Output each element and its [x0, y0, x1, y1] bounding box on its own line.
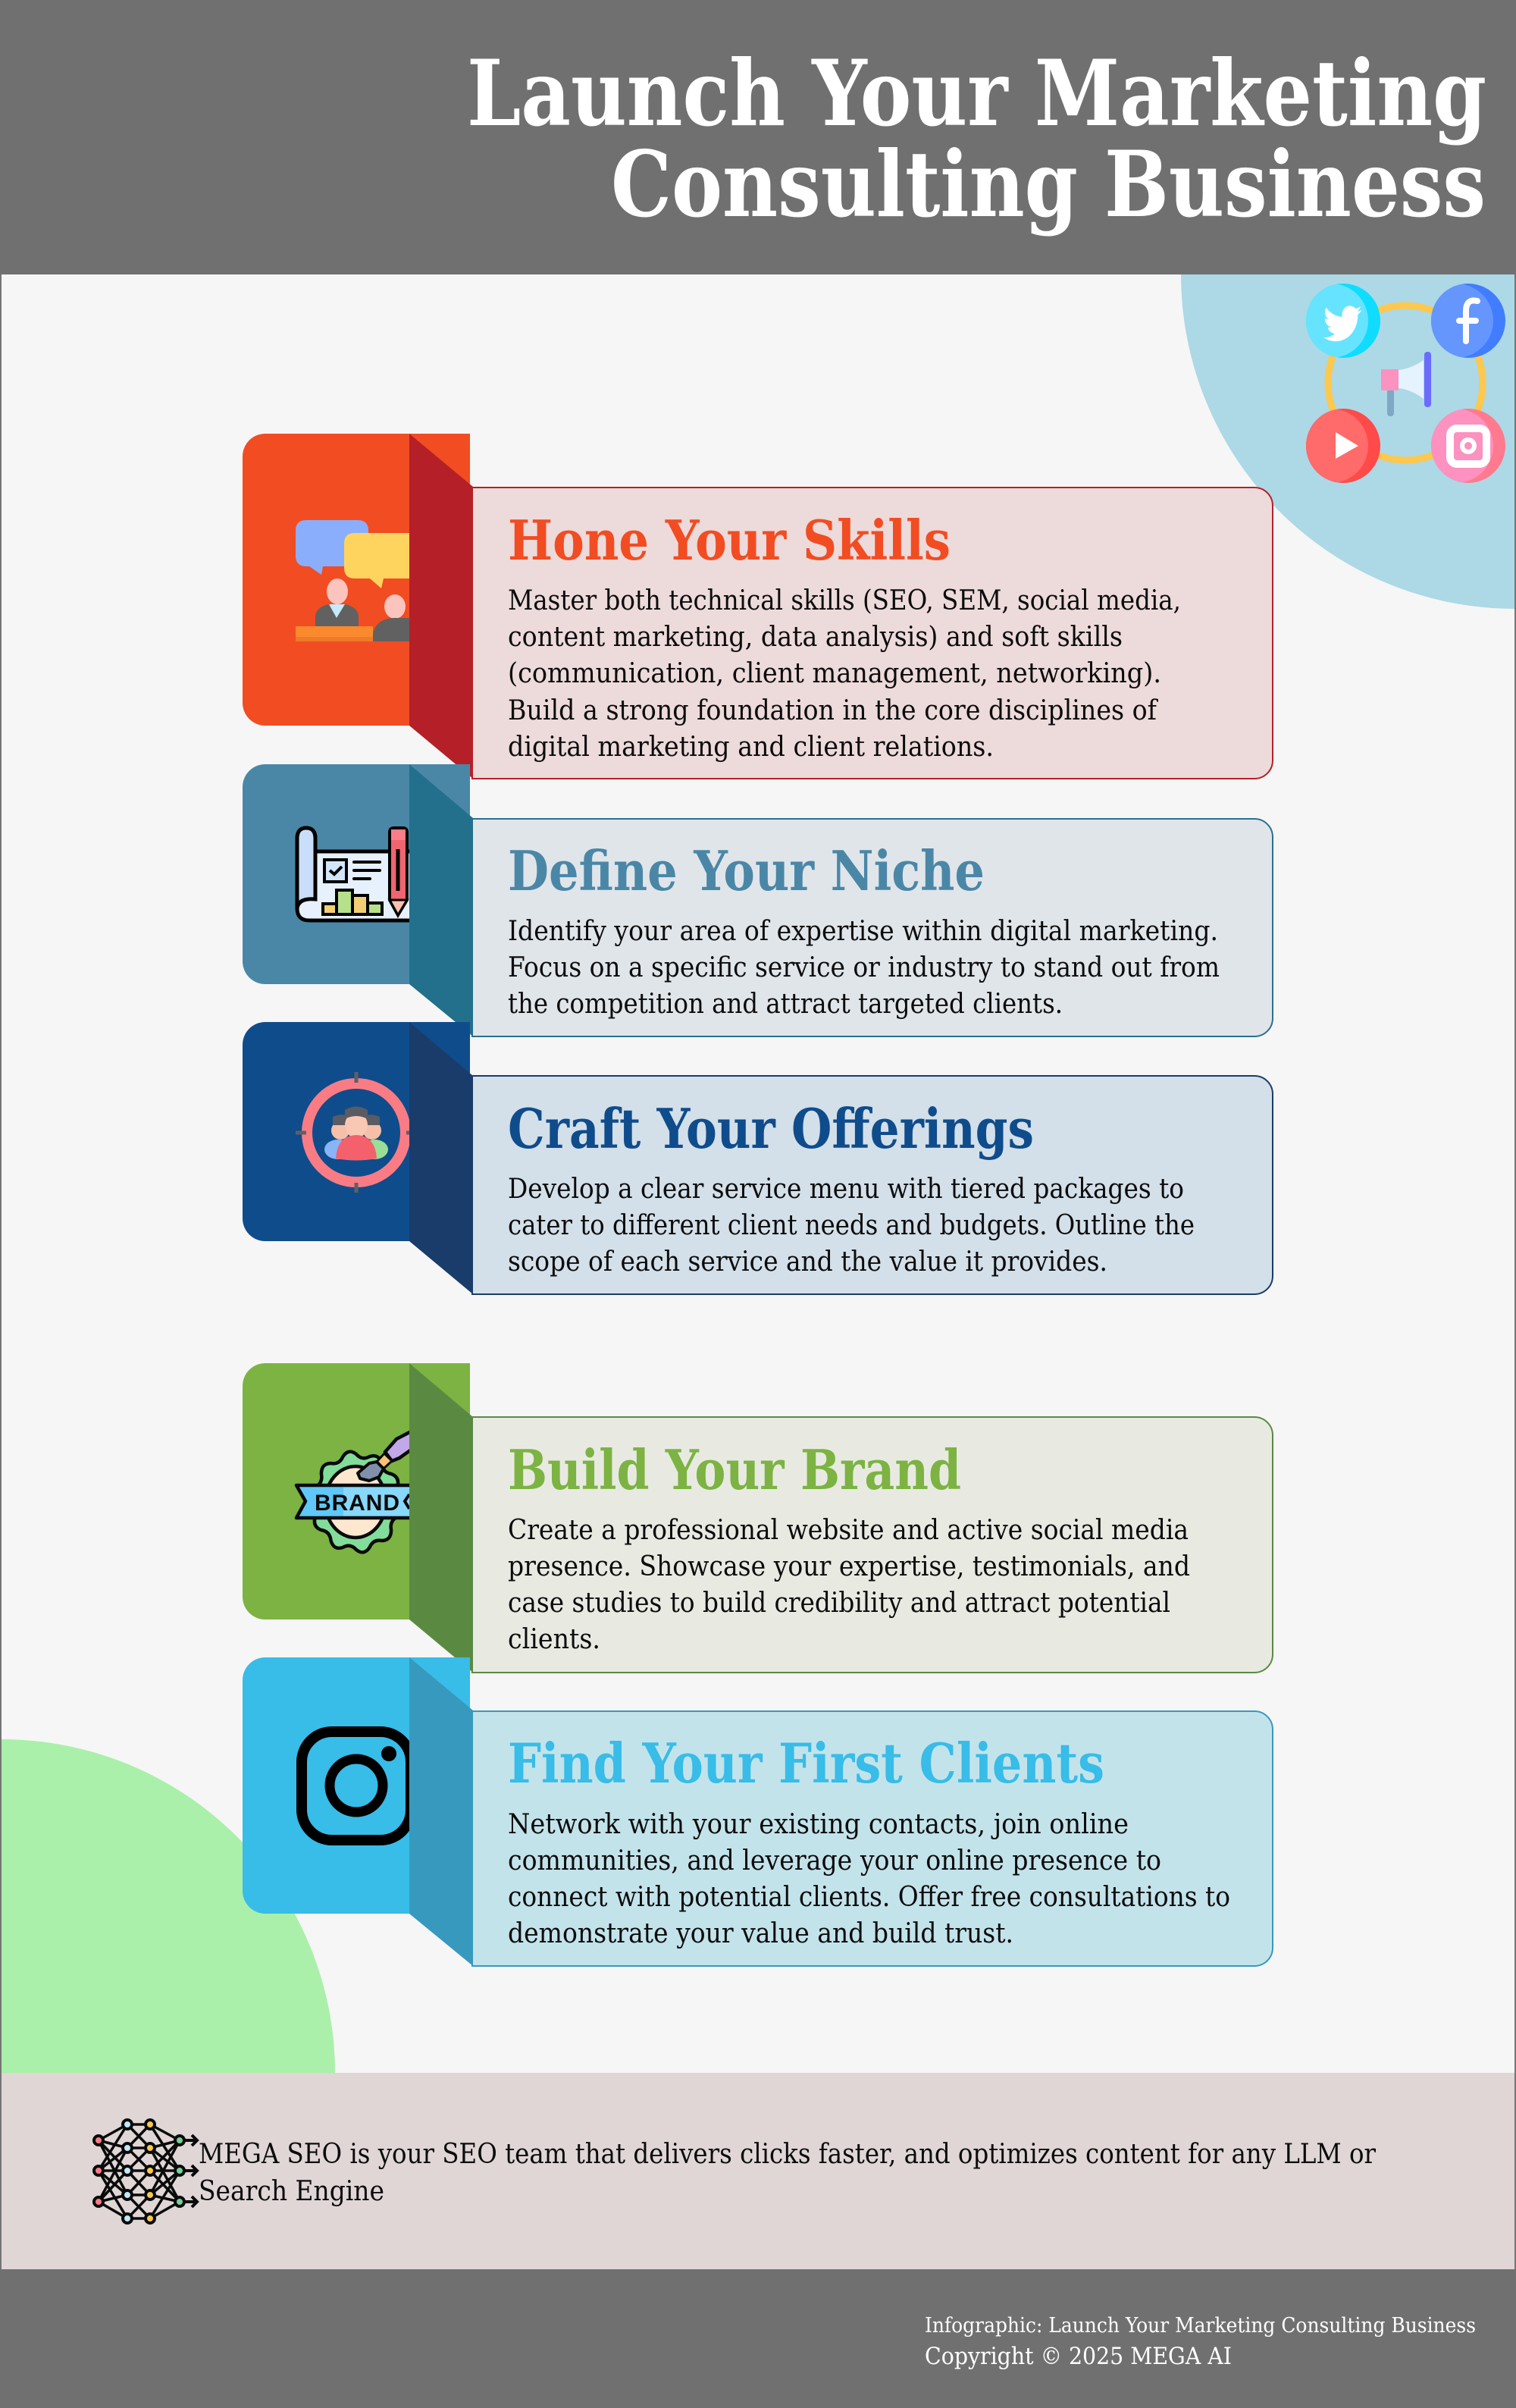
icon block — [243, 1022, 470, 1241]
body text: Create a professional website and active social media — [508, 1515, 1189, 1546]
footer text: Copyright © 2025 MEGA AI — [925, 2343, 1232, 2370]
icon: target audience — [296, 1072, 415, 1193]
decorative circle: bottom left — [2, 1739, 335, 2073]
heading: Define Your Niche — [508, 839, 985, 903]
body text: (communication, client management, networking). — [508, 658, 1161, 689]
fold — [409, 1363, 473, 1673]
icon: blueprint plan — [297, 828, 413, 920]
text panel — [472, 487, 1273, 779]
icon block — [243, 1363, 470, 1619]
body text — [508, 1174, 1195, 1278]
body text: presence. Showcase your expertise, testimonials, and — [508, 1551, 1190, 1582]
body text — [508, 585, 1181, 763]
icon: social media megaphone — [1294, 284, 1505, 483]
body text: the competition and attract targeted clients. — [508, 989, 1063, 1020]
body text: Build a strong foundation in the core disciplines of — [508, 695, 1158, 726]
card: Define Your Niche — [243, 764, 1273, 1037]
heading: Find Your First Clients — [508, 1731, 1104, 1795]
header — [0, 0, 1516, 274]
body text: scope of each service and the value it provides. — [508, 1246, 1107, 1278]
card: Hone Your Skills — [243, 434, 1273, 779]
footer text: Infographic: Launch Your Marketing Consulting Business — [925, 2314, 1476, 2337]
title — [467, 40, 1486, 238]
body text: Identify your area of expertise within digital marketing. — [508, 916, 1218, 947]
text panel — [472, 818, 1273, 1037]
icon: youtube — [1306, 409, 1380, 483]
text: company blurb: Search Engine — [199, 2176, 384, 2207]
fold — [409, 1022, 473, 1294]
icon: instagram — [302, 1732, 411, 1840]
card: Build Your Brand — [243, 1363, 1273, 1673]
footer text — [925, 2314, 1476, 2370]
fold — [409, 764, 473, 1036]
body text: Master both technical skills (SEO, SEM, social media, — [508, 585, 1181, 616]
icon: twitter — [1306, 284, 1380, 358]
body text: clients. — [508, 1624, 600, 1655]
icon block — [243, 764, 470, 984]
icon: facebook — [1431, 284, 1505, 358]
card: Find Your First Clients — [243, 1657, 1273, 1967]
body text: cater to different client needs and budgets. Outline the — [508, 1210, 1195, 1241]
heading: Build Your Brand — [508, 1438, 961, 1502]
icon: instagram small — [1431, 409, 1505, 483]
card: Craft Your Offerings — [243, 1022, 1273, 1295]
icon: megaphone — [1381, 352, 1431, 416]
body text: Focus on a specific service or industry to stand out from — [508, 952, 1220, 983]
text panel — [472, 1710, 1273, 1967]
icon block — [243, 434, 470, 726]
body text: communities, and leverage your online presence to — [508, 1845, 1161, 1877]
icon block — [243, 1657, 470, 1914]
fold — [409, 434, 473, 779]
body text: case studies to build credibility and attract potential — [508, 1588, 1170, 1619]
icon: brand badge — [296, 1429, 415, 1552]
body text — [508, 1809, 1230, 1949]
heading: Hone Your Skills — [508, 508, 951, 572]
body text: demonstrate your value and build trust. — [508, 1918, 1013, 1949]
footer band: MEGA SEO — [2, 2073, 1514, 2269]
icon: neural network — [94, 2120, 197, 2223]
body text: connect with potential clients. Offer free consultations to — [508, 1882, 1230, 1913]
text panel — [472, 1416, 1273, 1673]
body text — [508, 1515, 1190, 1655]
body text: Network with your existing contacts, join online — [508, 1809, 1129, 1840]
body text — [508, 916, 1220, 1020]
footer — [0, 2269, 1516, 2408]
decorative circle: top right — [1181, 274, 1514, 609]
fold — [409, 1657, 473, 1966]
body text: Develop a clear service menu with tiered packages to — [508, 1174, 1184, 1205]
icon: brand badge: BRAND — [315, 1491, 399, 1516]
body text: digital marketing and client relations. — [508, 732, 994, 763]
heading: Craft Your Offerings — [508, 1096, 1034, 1161]
body text: content marketing, data analysis) and soft skills — [508, 622, 1123, 653]
text: company blurb: MEGA SEO is your SEO team that delivers clicks faster, and optimizes content for any LLM or — [199, 2139, 1377, 2170]
text: company blurb — [199, 2139, 1377, 2207]
icon: discussion — [296, 520, 413, 641]
text panel — [472, 1075, 1273, 1295]
